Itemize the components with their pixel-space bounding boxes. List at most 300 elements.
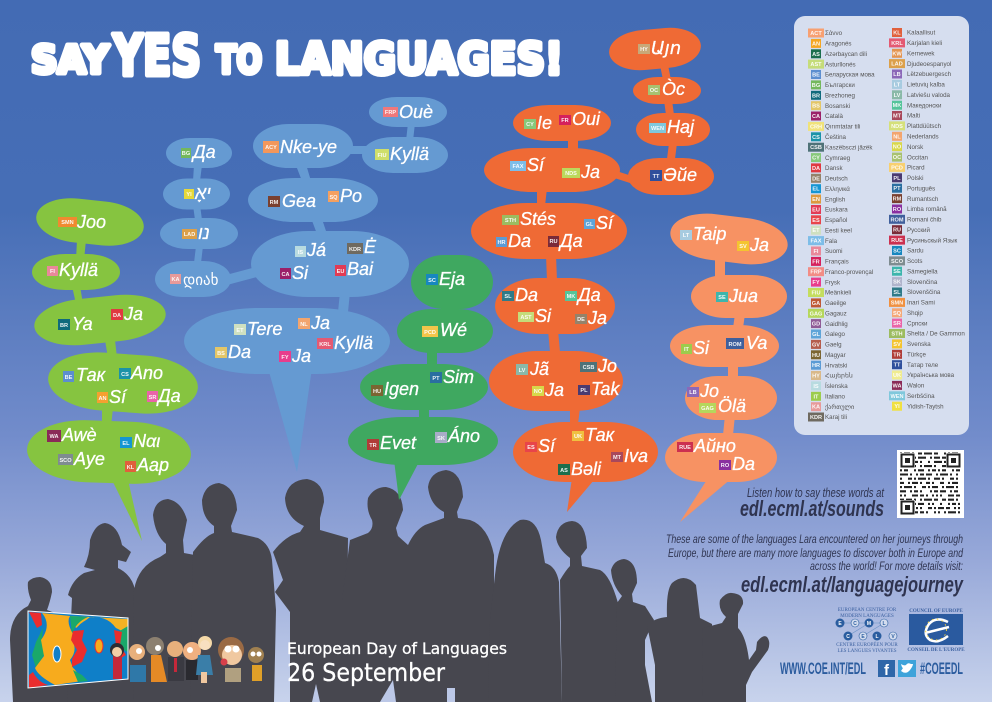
word: Ladino: LAD — [184, 232, 195, 238]
word group: Taip Ja: Taip — [693, 224, 726, 244]
legend column 1: Suomi — [825, 248, 843, 255]
word group: Tere Ja Da Ja Kyllä: Da — [228, 342, 251, 362]
legend column 1: ქართული — [825, 402, 854, 411]
word group: Awè Ναι Aye Aap: EL — [122, 441, 130, 447]
legend column 1: Gagauz — [825, 310, 847, 318]
logo: European Day of Languages faces — [28, 611, 128, 688]
legend column 2: PL — [893, 176, 901, 182]
word: Georgian: დიახ — [183, 271, 219, 289]
word: Kyllä (FIU): FIU — [377, 153, 387, 159]
legend column 2: Português — [907, 185, 935, 192]
legend column 1 — [808, 28, 875, 422]
word: Այո: Այո — [651, 38, 681, 58]
word group: Tere Ja Da Ja Kyllä: KRL — [319, 342, 331, 348]
legend column 2: YI — [894, 404, 900, 410]
word group: Tere Ja Da Ja Kyllä: FY — [281, 355, 289, 361]
legend column 2: PCD — [891, 165, 903, 171]
logo: ECML — [836, 608, 898, 654]
legend column 1: Fala — [825, 238, 838, 245]
legend column 2: SCO — [891, 259, 904, 265]
word group: Stés Sí Da Да: Да — [558, 231, 583, 251]
legend column 1: Karaj tili — [825, 414, 847, 421]
word group: Jã Jo Ja Tak: NO — [534, 389, 543, 395]
word group: Awè Ναι Aye Aap: KL — [127, 465, 135, 471]
word group: Ie Oui: FR — [561, 118, 569, 124]
word group: Awè Ναι Aye Aap: Aye — [73, 449, 105, 469]
word group: Так Sí Iva Bəli: Так — [585, 425, 616, 445]
word group: Jo Ölä — [687, 381, 746, 416]
legend column 2: SL — [893, 290, 901, 296]
word group: Awè Ναι Aye Aap — [47, 425, 169, 475]
legend column 2: RU — [893, 228, 901, 234]
word: Haj: Haj — [667, 117, 695, 137]
word group: Так Sí Iva Bəli — [525, 425, 648, 479]
legend column 2: SK — [893, 280, 901, 286]
word: Gea and Po: Gea — [282, 191, 316, 211]
word group: Awè Ναι Aye Aap: WA — [49, 434, 59, 440]
legend column 1: CSB — [810, 145, 822, 151]
word: Әйе: TT — [653, 174, 660, 180]
title: TO — [216, 38, 262, 82]
word: Ladino: נו — [198, 223, 210, 243]
word: Jua — [716, 286, 758, 306]
legend column 1: GL — [812, 332, 820, 338]
word: Joo: SMN — [61, 220, 74, 226]
legend column 2: Русиньскый Язык — [907, 237, 958, 244]
word group: Awè Ναι Aye Aap: SCO — [59, 458, 72, 464]
legend column 2: Kalaallisut — [907, 30, 935, 37]
word group: Da Да Si Ja: MK — [567, 294, 575, 300]
title: SAY — [31, 38, 109, 82]
legend column 1: BS — [812, 104, 820, 110]
word: Ya and Ja: Ya — [72, 314, 93, 334]
legend column 2: MT — [893, 114, 902, 120]
word group: Sí Ja: FAX — [513, 164, 524, 170]
legend column 2: Kernewek — [907, 50, 935, 58]
word: Ya and Ja: BR — [60, 323, 68, 329]
title: YES — [112, 24, 201, 89]
word group: Da Да Si Ja — [502, 285, 607, 328]
legend column 1: Հայերեն — [825, 373, 853, 380]
word group: Igen Sim: PT — [432, 376, 440, 382]
word: Nke-ye: Nke-ye — [280, 137, 337, 157]
word: Yiddish: YI — [186, 192, 192, 198]
word group: Já Ė Si Bai: KDR — [349, 247, 361, 253]
legend column 2: Occitan — [907, 154, 929, 161]
illustration: cartoon characters — [110, 636, 264, 683]
word group: Tere Ja Da Ja Kyllä: Kyllä — [334, 333, 373, 353]
word group: Так Sí Iva Bəli: Bəli — [571, 459, 602, 479]
word: Òc — [648, 78, 685, 99]
logo: ECML: L — [882, 621, 886, 627]
word group: Já Ė Si Bai: Ė — [364, 237, 377, 257]
logo: ECML: L — [875, 634, 879, 640]
word group: Tere Ja Da Ja Kyllä — [215, 313, 373, 366]
word: Yiddish — [184, 183, 211, 203]
word group: Stés Sí Da Да: RU — [549, 239, 558, 245]
legend column 2: Српски — [907, 320, 928, 327]
word group: Evet Áno: Áno — [447, 426, 480, 446]
word group: Já Ė Si Bai: CA — [281, 272, 290, 278]
legend column 2: Shelta / De Gammon — [907, 331, 965, 338]
legend column 2: Picard — [907, 165, 925, 172]
word group: Si Va: Si — [693, 338, 710, 358]
word group: Айно Da: Айно — [693, 436, 736, 456]
word: Да (BG): Да — [191, 142, 216, 162]
word group: Jo Ölä: GAG — [701, 406, 714, 412]
word: Nke-ye: ACY — [265, 145, 277, 151]
word group: Taip Ja: Ja — [749, 235, 769, 255]
word group: Jã Jo Ja Tak: Jã — [529, 359, 549, 379]
word group: Evet Áno: Evet — [380, 433, 417, 453]
word group: Igen Sim: HU — [373, 389, 381, 395]
word group: Stés Sí Da Да — [496, 209, 615, 251]
word group: Evet Áno: TR — [369, 443, 377, 449]
word: Ya and Ja — [58, 304, 143, 334]
legend column 2: Svenska — [907, 341, 931, 348]
legend column 1: FAX — [811, 239, 822, 245]
legend column 2: NO — [893, 145, 902, 151]
word group: Так Ano Sí Да: CS — [121, 372, 129, 378]
word group: Si Va: ROM — [728, 342, 742, 348]
legend column 1: CY — [812, 156, 820, 162]
word: Այո: HY — [640, 47, 648, 53]
legend column 1: Gaeilge — [825, 300, 847, 307]
logo: ECML: V — [891, 634, 895, 640]
legend column 1: Galego — [825, 331, 846, 338]
legend column 1: Íslenska — [825, 383, 848, 390]
logo: Council of Europe — [907, 609, 965, 653]
legend column 2: KL — [893, 30, 901, 36]
legend column 2: PT — [893, 186, 901, 192]
legend column 1: ES — [812, 218, 820, 224]
legend column 2: Русский — [907, 227, 931, 234]
legend column 1: Gaidhlig — [825, 321, 848, 328]
legend column 2: Latviešu valoda — [907, 92, 951, 99]
word group: Так Sí Iva Bəli: ES — [527, 445, 535, 451]
legend column 1: Kaszëbsczi jãzëk — [825, 144, 873, 151]
word group: Taip Ja: LT — [683, 233, 690, 239]
word group: Так Ano Sí Да: Да — [156, 386, 181, 406]
logo: ECML: E — [838, 621, 842, 627]
legend column 2: Македонски — [907, 102, 942, 109]
legend column 2: Norsk — [907, 144, 924, 151]
legend column 2: Karjalan kieli — [907, 40, 942, 47]
legend column 1: BG — [812, 83, 820, 89]
word group: Taip Ja: SV — [739, 244, 747, 250]
legend column 1: Gaelg — [825, 342, 842, 349]
legend column 1: FI — [814, 249, 819, 255]
word: Haj — [649, 117, 695, 137]
word group: Так Ano Sí Да: SR — [149, 395, 156, 401]
legend column 2: Plattdüütsch — [907, 123, 942, 130]
legend column 1: FY — [812, 280, 820, 286]
word: Joo: Joo — [76, 212, 106, 232]
legend column 2: Slovenščina — [907, 289, 941, 296]
word: Jua: Jua — [728, 286, 758, 306]
word: Ya and Ja: DA — [113, 313, 121, 319]
word group: Da Да Si Ja: Да — [576, 285, 601, 305]
speech bubbles: light green chain — [26, 194, 200, 541]
word: Òc: Òc — [662, 78, 685, 99]
silhouettes: crowd of people — [10, 470, 769, 702]
word: Gea and Po: Po — [340, 186, 362, 206]
word group: Так Ano Sí Да: Ano — [130, 363, 163, 383]
word group: Tere Ja Da Ja Kyllä: NL — [300, 322, 308, 328]
legend column 2: Serbšćina — [907, 393, 935, 400]
text: listen to sounds — [740, 485, 885, 521]
icon: twitter — [898, 660, 916, 677]
logo: ECML: CENTRE EUROPÉEN POUR — [836, 642, 898, 648]
legend column 1: IS — [813, 384, 819, 390]
legend column 2: Татар теле — [907, 362, 939, 369]
legend column 2: TR — [893, 352, 901, 358]
legend column 1: AS — [812, 52, 820, 58]
word group: Da Да Si Ja: DE — [577, 317, 585, 323]
speech bubbles: orange chain left — [471, 25, 714, 512]
legend column 2: Malti — [907, 113, 920, 120]
legend column 2: Shqip — [907, 310, 923, 317]
text: more languages note — [666, 534, 963, 573]
word: Да (BG): BG — [182, 151, 190, 157]
word group: Ie Oui — [524, 109, 601, 133]
word group: Так Ano Sí Да — [63, 363, 181, 407]
word group: Jã Jo Ja Tak: Ja — [544, 380, 564, 400]
legend column 2: Sámegiella — [907, 268, 938, 275]
word group: Stés Sí Da Да: Da — [508, 231, 531, 251]
legend column 2: Slovenčina — [907, 279, 938, 286]
legend column 1: AN — [812, 41, 820, 47]
word: Kyllä: Kyllä — [59, 260, 98, 280]
legend column 2: Türkçe — [907, 352, 926, 358]
word: Jua: SE — [718, 295, 726, 301]
text: European Day of Languages date: 26 September — [287, 658, 446, 687]
legend column 1: HY — [812, 374, 820, 380]
legend column 1: Eesti keel — [825, 227, 852, 234]
word group: Айно Da: Da — [732, 454, 755, 474]
legend column 1: Azərbaycan dili — [825, 51, 867, 58]
legend column 2: SQ — [893, 311, 902, 317]
legend column 1: FRP — [810, 270, 822, 276]
legend column 1: BR — [812, 93, 820, 99]
legend column 1: GV — [812, 342, 820, 348]
word: Yiddish: יאָ — [194, 183, 211, 203]
legend column 1: Deutsch — [825, 176, 848, 182]
word group: Jã Jo Ja Tak: PL — [580, 388, 588, 394]
logo: ECML: MODERN LANGUAGES — [840, 614, 894, 619]
legend column 1: Беларуская мова — [825, 72, 875, 79]
word group: Stés Sí Da Да: GL — [586, 222, 594, 228]
word group: Da Да Si Ja: AST — [520, 315, 532, 321]
word group: Tere Ja Da Ja Kyllä: ET — [236, 328, 244, 334]
title: LANGUAGES! — [275, 34, 563, 85]
word group: Jo Ölä: LB — [689, 390, 697, 396]
word group: Sí Ja: Sí — [527, 155, 546, 175]
legend column 2: MK — [893, 103, 901, 109]
word group: Igen Sim — [371, 367, 474, 399]
word group: Так Sí Iva Bəli: UK — [574, 434, 582, 440]
word group: Jo Ölä: Ölä — [718, 396, 746, 416]
legend column 2: RUE — [891, 238, 903, 244]
legend column 1: KDR — [810, 415, 822, 421]
text: European Day of Languages date: European Day of Languages — [287, 639, 507, 658]
word group: Sí Ja: Ja — [580, 162, 600, 182]
logo: Council of Europe: CONSEIL DE L'EUROPE — [907, 648, 965, 653]
word group: Já Ė Si Bai: Já — [306, 240, 326, 260]
legend column 2: WEN — [890, 394, 904, 400]
word group: Evet Áno — [367, 426, 480, 453]
text: listen to sounds: edl.ecml.at/sounds — [740, 496, 884, 521]
legend column 2: LB — [893, 72, 901, 78]
legend column 2: Sardu — [907, 248, 924, 255]
speech bubbles: light orange chain — [665, 209, 790, 522]
legend column 1: DE — [812, 176, 820, 182]
word group: Ie Oui: CY — [526, 122, 534, 128]
legend column 1: Aragonés — [825, 41, 852, 48]
word group: Stés Sí Da Да: Stés — [520, 209, 556, 229]
legend column 2: NL — [893, 134, 901, 140]
word group: Так Ano Sí Да: AN — [98, 396, 107, 402]
legend column 2: SV — [893, 342, 901, 348]
legend column 2: KW — [892, 51, 902, 57]
legend column 1: ET — [812, 228, 820, 234]
legend column 1: GA — [812, 301, 820, 307]
legend column 2: LAD — [891, 62, 903, 68]
legend column 1: GD — [812, 322, 820, 328]
legend column 2: Walon — [907, 383, 925, 390]
legend column 1: Čeština — [825, 134, 847, 141]
legend column 1: Français — [825, 259, 849, 266]
legend column 1: Italiano — [825, 394, 846, 400]
legend column 1: KA — [812, 405, 820, 411]
legend column 2: Lietuvių kalba — [907, 82, 945, 89]
legend column 1: Català — [825, 113, 843, 120]
speech bubbles: blue chain — [155, 97, 448, 472]
icon: facebook: f — [884, 662, 890, 679]
word group: Si Va: IT — [684, 347, 690, 353]
word group: Так Ano Sí Да: BE — [65, 375, 73, 381]
legend column 2 — [889, 28, 965, 411]
word group: Jã Jo Ja Tak — [516, 356, 620, 400]
legend column 1: Franco-provençal — [825, 269, 873, 276]
word: Haj: WEN — [651, 126, 664, 132]
legend column 1: Asturllonés — [825, 61, 856, 68]
legend column 1: GAG — [810, 311, 822, 317]
word group: Já Ė Si Bai: Si — [292, 263, 309, 283]
legend column 2: Limba română — [907, 206, 947, 213]
word group: Igen Sim: Igen — [384, 379, 419, 399]
word group: Da Да Si Ja: Da — [515, 285, 538, 305]
word: Wé: PCD — [424, 330, 436, 336]
legend column 2: ROM — [890, 217, 904, 223]
word group: Айно Da — [677, 436, 755, 474]
text: European Day of Languages date — [287, 639, 507, 687]
legend column 2: SMN — [891, 300, 903, 306]
word: Այո — [638, 38, 681, 58]
legend column 1: HR — [812, 363, 820, 369]
legend column 2: Djudeoespanyol — [907, 61, 951, 68]
legend column 1: CA — [812, 114, 820, 120]
legend column 2: KRL — [891, 41, 903, 47]
word group: Айно Da: RUE — [679, 445, 691, 451]
word group: Evet Áno: SK — [437, 436, 445, 442]
legend column 1: ACT — [810, 31, 822, 37]
word group: Awè Ναι Aye Aap: Nαι — [133, 431, 160, 451]
word: Да (BG) — [181, 142, 216, 162]
word group: Так Ano Sí Да: Sí — [109, 387, 128, 407]
word group: Tere Ja Da Ja Kyllä: Tere — [247, 319, 282, 339]
word: Eja: Eja — [439, 269, 465, 289]
legend column 2: TT — [894, 363, 901, 369]
word: Eja: SC — [428, 278, 436, 284]
legend column 1: EL — [812, 187, 820, 193]
word group: Da Да Si Ja: Si — [535, 306, 552, 326]
word: Gea and Po: RM — [270, 200, 279, 206]
legend column 1: Σάννο — [825, 30, 843, 37]
legend column 1: Euskara — [825, 207, 848, 214]
word group: Ie Oui: Ie — [537, 113, 552, 133]
legend column 2: STH — [891, 332, 903, 338]
legend column 2: RO — [893, 207, 902, 213]
legend column 2: Polski — [907, 175, 924, 182]
logo: ECML: M — [867, 621, 871, 627]
legend column 2: Inari Sami — [907, 300, 935, 307]
word group: Igen Sim: Sim — [443, 367, 474, 387]
word group: Sí Ja: NDS — [565, 171, 577, 177]
word group: Jã Jo Ja Tak: CSB — [583, 365, 594, 371]
legend column 1: Español — [825, 217, 847, 224]
legend column 1: EU — [812, 208, 820, 214]
word: Әйе: Әйе — [663, 165, 697, 185]
legend column 1: DA — [812, 166, 820, 172]
word group: Stés Sí Da Да: HR — [497, 240, 506, 246]
legend column 2: RM — [893, 197, 902, 203]
legend column 2: Scots — [907, 258, 922, 265]
legend column 2: Українська мова — [907, 372, 955, 379]
word: Gea and Po: SQ — [329, 195, 338, 201]
word group: Jo Ölä: Jo — [699, 381, 719, 401]
legend column 1: English — [825, 196, 846, 203]
legend column 1: BE — [812, 72, 820, 78]
logo: ECML: E — [861, 634, 865, 640]
legend column 1: HU — [812, 353, 820, 359]
QR code — [897, 450, 964, 518]
word group: Так Sí Iva Bəli: AS — [560, 468, 568, 474]
word: Gea and Po — [268, 186, 362, 211]
legend column 1: Български — [825, 82, 855, 89]
word group: Stés Sí Da Да: Sí — [596, 213, 615, 233]
word group: Awè Ναι Aye Aap: Awè — [61, 425, 97, 445]
word group: Awè Ναι Aye Aap: Aap — [136, 455, 169, 475]
word group: Так Sí Iva Bəli: MT — [613, 455, 622, 461]
legend column 1: Magyar — [825, 352, 846, 359]
legend column 2: Romani čhib — [907, 216, 942, 224]
word group: Jã Jo Ja Tak: Tak — [591, 379, 620, 399]
word group: Si Va: Va — [746, 333, 767, 353]
word: Ouè: FRP — [385, 110, 396, 116]
word group: Jã Jo Ja Tak: LV — [519, 368, 526, 374]
word group: Айно Da: RO — [721, 463, 730, 469]
legend column 2: Yidish-Taytsh — [907, 403, 944, 410]
word group: Ie Oui: Oui — [572, 109, 601, 129]
legend column 1: Ελληνικά — [825, 186, 850, 193]
word group: Da Да Si Ja: SL — [504, 294, 512, 300]
logo: ECML: LES LANGUES VIVANTES — [838, 649, 897, 654]
word: Ladino — [182, 223, 210, 243]
legend column 1: Dansk — [825, 165, 843, 172]
legend column 2: WA — [892, 383, 902, 389]
icon: facebook — [878, 660, 895, 679]
